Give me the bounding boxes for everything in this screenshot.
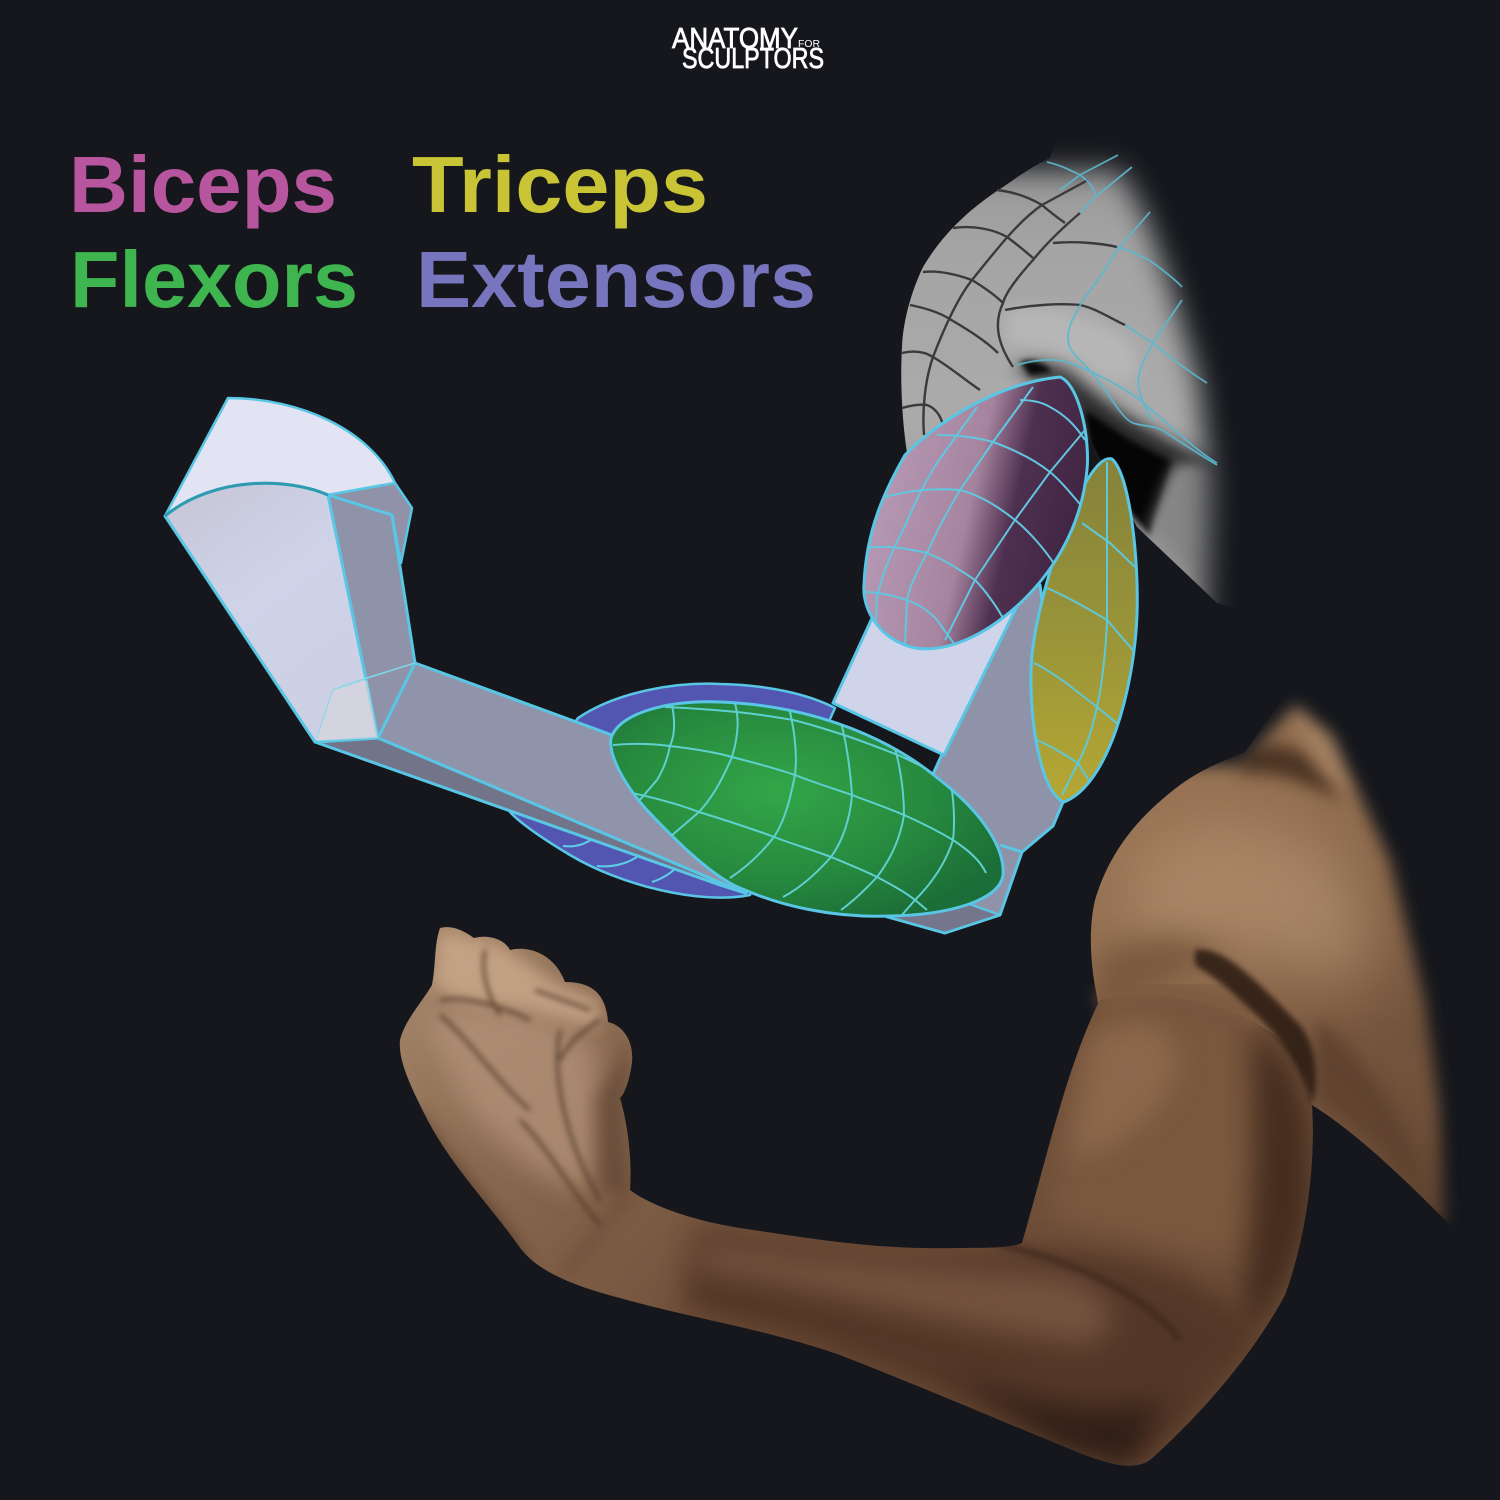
- label: Extensors: Extensors: [416, 235, 816, 324]
- flexor muscle form (green): [611, 702, 1003, 916]
- label: Biceps: Biceps: [69, 140, 337, 229]
- extensor muscle form (blue, behind forearm): [510, 684, 835, 898]
- photo: greyscale shoulder with surface grid: [901, 150, 1230, 606]
- 3D block arm: [165, 377, 1137, 933]
- label: Flexors: Flexors: [70, 235, 358, 324]
- forearm block: [315, 663, 770, 893]
- upper arm block: [833, 585, 1068, 933]
- logo: Anatomy for Sculptors: [672, 23, 824, 75]
- label: Triceps: Triceps: [412, 140, 708, 229]
- armpit crease: [1195, 950, 1316, 1105]
- grid lines: cyan: [1017, 155, 1217, 465]
- deltoid to biceps blend: [1100, 992, 1260, 1020]
- hand block: [165, 398, 415, 742]
- logo: Anatomy for Sculptors: ANATOMY: [672, 23, 798, 55]
- grid lines: dark: [902, 180, 1125, 435]
- biceps muscle form (purple): [862, 377, 1088, 649]
- legend: muscle group names: [69, 140, 816, 324]
- arm shading: [400, 930, 1312, 1470]
- arm body: [400, 927, 1313, 1466]
- shoulder and chest with soft edge: [1090, 698, 1452, 1224]
- logo: Anatomy for Sculptors: SCULPTORS: [682, 43, 824, 75]
- photo: flexed arm: [400, 650, 1500, 1470]
- triceps muscle form (yellow): [1031, 459, 1137, 802]
- logo: Anatomy for Sculptors: FOR: [798, 39, 820, 50]
